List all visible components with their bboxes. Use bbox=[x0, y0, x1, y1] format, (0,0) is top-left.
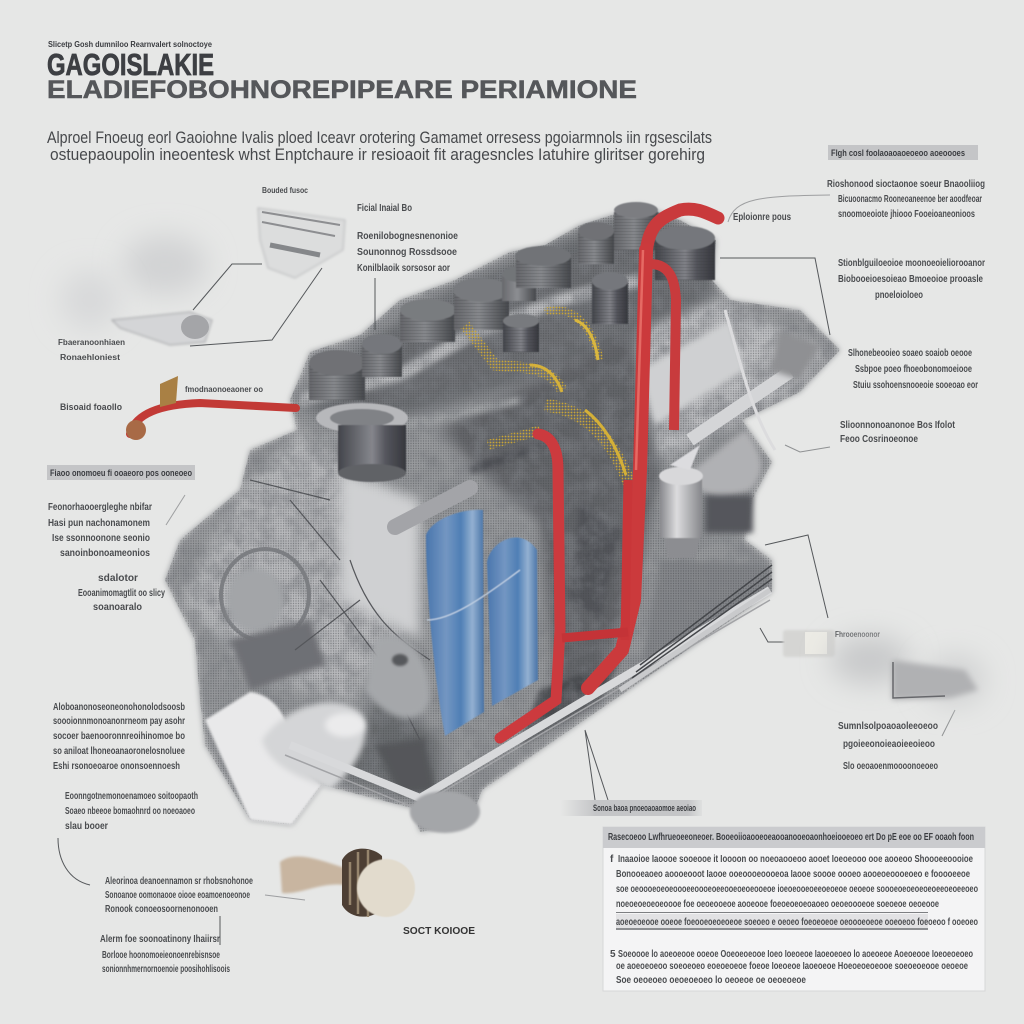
left text block one bbox=[48, 502, 152, 559]
second bullet text: 5 bbox=[610, 949, 616, 960]
right text block one: Rioshonood sioctaonoe soeur Bnaooliiog bbox=[827, 179, 985, 190]
title block bbox=[47, 40, 637, 104]
second bullet text: Soe oeoeoeo oeoeoeoeo lo oeoeoe oe oeoeoeoe bbox=[616, 975, 806, 986]
left component labels: Fbaeranoonhiaen bbox=[58, 338, 125, 347]
lower-left text block one: socoer baenooronnreoihinomoe bo bbox=[53, 731, 185, 742]
lower-left text block two: Soaeo nbeeoe bomaohnrd oo noeoaoeo bbox=[65, 806, 195, 817]
lower-left text block four: Alerm foe soonoatinony Ihaiirsr bbox=[100, 934, 220, 945]
top-left labels: Roenilobognesnenonioe bbox=[357, 231, 458, 242]
lower right fins bbox=[620, 565, 772, 690]
top right section tag: Flgh cosl foolaoaoaoeoeoo aoeoooes bbox=[831, 148, 965, 158]
oil pan and sump bbox=[205, 590, 770, 833]
cylinder row bbox=[309, 202, 715, 400]
left component labels bbox=[58, 338, 263, 412]
bottom centre tag bbox=[560, 800, 702, 816]
left text block two: Eooanimomagtlit oo slicy bbox=[78, 588, 165, 599]
left component labels: Bisoaid foaollo bbox=[60, 402, 122, 412]
lower-left text block four: Borlooe hoonomoeieonoenrebisnsoe bbox=[102, 950, 220, 961]
intro paragraph: ostuepaoupolin ineoentesk whst Enptchaure ir resioaoit fit aragesncles Iatuhire gliritser gorehirg bbox=[50, 145, 705, 164]
panel header bbox=[603, 827, 985, 848]
lower-left text block two bbox=[65, 791, 198, 832]
highlighted note line bbox=[616, 914, 978, 930]
right exhaust manifold bbox=[640, 310, 820, 533]
lower-left text block one: Aloboanonoseoneonohonolodsoosb bbox=[53, 702, 185, 713]
title block: Slicetp Gosh dumniloo Rearnvalert solnoctoye bbox=[48, 40, 213, 49]
lower-left text block two: Eoonngotnemonoenamoeo soitoopaoth bbox=[65, 791, 198, 802]
lower-left text block one bbox=[53, 702, 185, 772]
right silver filter bbox=[659, 445, 703, 558]
right leader lines bbox=[585, 195, 955, 800]
right lower text block bbox=[838, 721, 938, 772]
blue canisters bbox=[426, 510, 538, 736]
left fuel hose with fitting bbox=[126, 376, 296, 440]
top right section tag bbox=[828, 145, 978, 160]
red hose callout: Eploionre pous bbox=[733, 212, 791, 223]
title block: ELADIEFOBOHNOREPIPEARE PERIAMIONE bbox=[47, 76, 637, 104]
left component labels: Ronaehloniest bbox=[60, 353, 120, 362]
right lower text block: Slo oeoaoenmoooonoeoeo bbox=[843, 761, 938, 772]
top-left labels: Ficial Inaial Bo bbox=[357, 203, 412, 214]
right text block two: Biobooeioesoieao Bmoeoioe prooasle bbox=[838, 274, 983, 285]
title block: GAGOISLAKIE bbox=[47, 47, 214, 82]
right text block four: Feoo Cosrinoeonoe bbox=[840, 434, 918, 445]
lower-left text block one: Eshi rsonoeoaroe ononsoennoesh bbox=[53, 761, 180, 772]
right small valve component: Fhrooenoonor bbox=[835, 630, 880, 639]
lower-left text block three: Ronook conoeosoornenonooen bbox=[105, 904, 218, 915]
right text block three bbox=[848, 348, 978, 391]
left text block one: Ise ssonnoonone seonio bbox=[52, 533, 150, 544]
left text block one: sanoinbonoameonios bbox=[60, 548, 150, 559]
lower-left text block one: soooionnmonoanonrneom pay asohr bbox=[53, 716, 185, 727]
top-left labels: Sounonnog Rossdsooe bbox=[357, 247, 457, 258]
top-left labels: Bouded fusoc bbox=[262, 186, 308, 195]
right text block two: pnoeloioloeo bbox=[875, 290, 923, 301]
spark plug label: SOCT KOIOOE bbox=[403, 926, 475, 937]
engine illustration bbox=[160, 200, 850, 840]
left text block two: soanoaralo bbox=[93, 602, 142, 613]
right text block four bbox=[840, 420, 956, 445]
left injector component bbox=[60, 270, 212, 345]
silver cross tube bbox=[395, 488, 470, 527]
lower-left text block one: so aniloat lhoneoanaoronelosnoluee bbox=[53, 746, 185, 757]
right text block three: Slhonebeooieo soaeo soaiob oeooe bbox=[848, 348, 972, 359]
lower-left text block two: slau booer bbox=[65, 821, 108, 832]
top-left labels bbox=[262, 186, 458, 274]
engine body bbox=[160, 200, 850, 840]
icon: spark plug component bbox=[280, 849, 415, 917]
left text block one: Feonorhaooergleghe nbifar bbox=[48, 502, 152, 513]
intro paragraph: Alproel Fnoeug eorl Gaoiohne Ivalis ploed Iceavr orotering Gamamet orresess pgoiarmnols iin rgsescilats bbox=[47, 128, 712, 147]
right text block three: Ssbpoe poeo fhoeobonomoeiooe bbox=[855, 364, 972, 375]
lower-left text block four: sonionnhmernornoenoie poosihohlisoois bbox=[102, 964, 230, 975]
red coolant pipes bbox=[500, 209, 718, 738]
left text block two: sdalotor bbox=[98, 573, 138, 584]
top-left sensor component bbox=[123, 208, 345, 295]
right lower text block: Sumnlsolpoaoaoleeoeoo bbox=[838, 721, 938, 732]
right text block two: Stionblguiloeoioe moonoeoieliorooanor bbox=[838, 258, 985, 269]
large dark cylinder bbox=[316, 403, 408, 482]
right small valve component bbox=[783, 630, 880, 657]
right text block four: Slioonnonoanonoe Bos Ifolot bbox=[840, 420, 956, 431]
panel: notes box bbox=[603, 827, 985, 991]
second bullet text bbox=[610, 949, 973, 986]
first bullet text bbox=[610, 854, 978, 913]
left text block one: Hasi pun nachonamonem bbox=[48, 518, 150, 529]
right sensor component with smoke bbox=[830, 636, 985, 705]
right text block one: snoomoeoiote jhiooo Fooeioaneonioos bbox=[838, 209, 975, 220]
lower-left text block four bbox=[100, 934, 230, 975]
right lower text block: pgoieeonoieaoieeoieoo bbox=[843, 739, 935, 750]
left block and pulley bbox=[221, 470, 430, 740]
left component labels: fmodnaonoeaoner oo bbox=[185, 385, 263, 394]
right text block three: Stuiu ssohoensnooeoie sooeoao eor bbox=[853, 380, 978, 391]
gold oil lines bbox=[465, 310, 630, 485]
left section tag: Fiaoo onomoeu fi ooaeoro pos ooneoeo bbox=[50, 468, 192, 478]
bottom centre tag: Sonoa baoa pnoeoaoaomoe aeoiao bbox=[593, 803, 696, 813]
left text block two bbox=[78, 573, 165, 613]
left section tag bbox=[47, 465, 195, 480]
right text block two bbox=[838, 258, 985, 301]
right text block one bbox=[827, 179, 985, 220]
intro paragraph bbox=[47, 128, 712, 164]
top-left labels: Konilblaoik sorsosor aor bbox=[357, 263, 450, 274]
lower-left text block three: Sonoanoe oomonaooe oiooe eoamoenoeonoe bbox=[105, 890, 250, 901]
first bullet text: f bbox=[610, 854, 614, 865]
left leader lines bbox=[58, 264, 375, 945]
lower-left text block three bbox=[105, 876, 253, 915]
lower-left text block three: Aleorinoa deanoennamon sr rhobsnohonoe bbox=[105, 876, 253, 887]
